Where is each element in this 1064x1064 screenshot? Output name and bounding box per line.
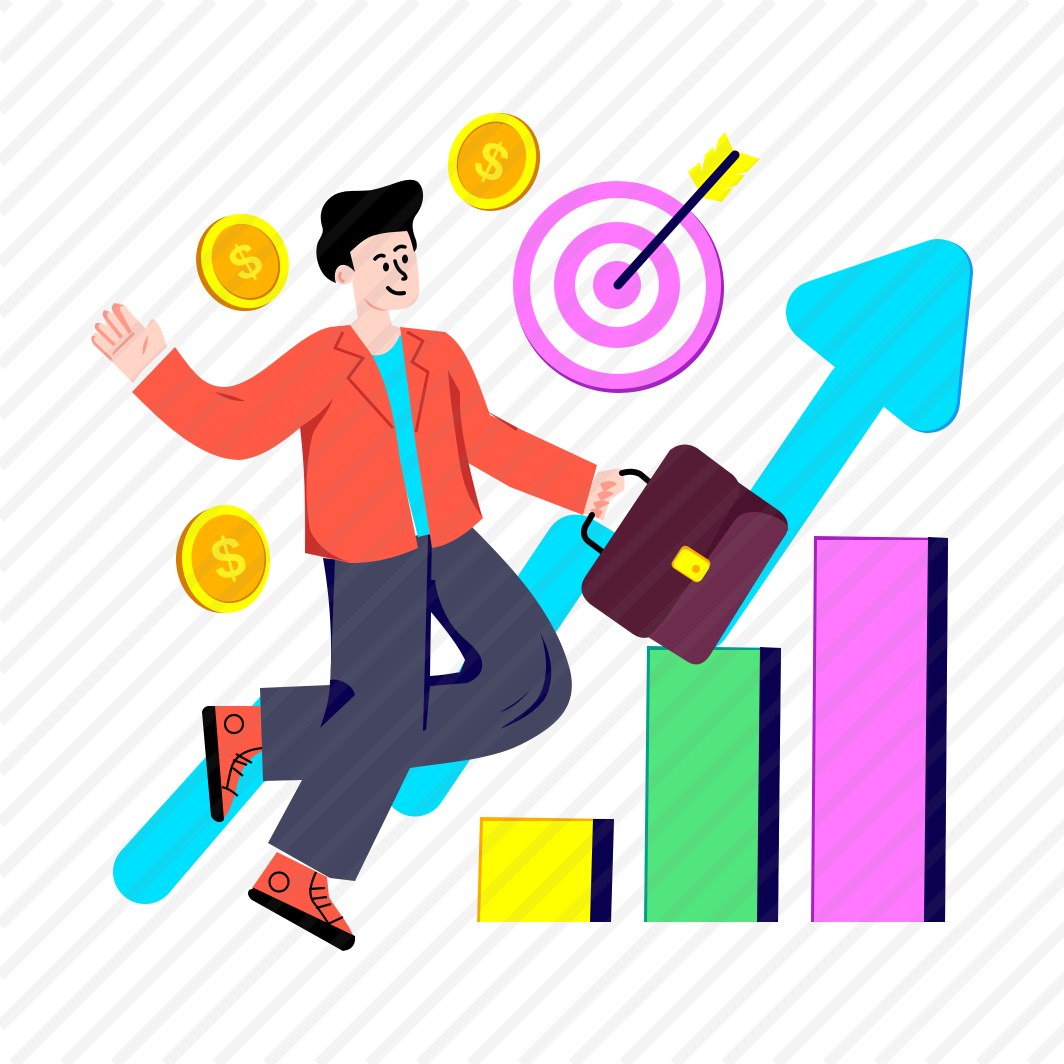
- handle: [584, 472, 652, 553]
- coin left upper: [180, 199, 304, 326]
- growth arrow: [113, 271, 941, 904]
- coin left upper: $: [219, 231, 272, 293]
- pants: [260, 527, 572, 881]
- left hand: [91, 303, 167, 383]
- right hand: [578, 468, 624, 520]
- target: [513, 181, 724, 393]
- front shoe: [248, 852, 355, 951]
- navy leg shadow: [323, 558, 340, 690]
- shirt: [372, 335, 434, 537]
- neck and head: [316, 180, 423, 362]
- pants leg gap: [423, 535, 482, 731]
- person: [91, 180, 788, 951]
- lapels: [335, 332, 393, 428]
- jacket: [132, 325, 597, 563]
- coin top: $: [465, 128, 518, 195]
- bar: purple: [811, 536, 948, 922]
- face features: [375, 246, 406, 293]
- coin left lower: $: [204, 523, 252, 594]
- briefcase: [581, 444, 788, 664]
- clasp: [670, 544, 712, 584]
- dart: [618, 132, 760, 285]
- bar chart: [477, 536, 948, 922]
- bar: yellow: [477, 817, 614, 922]
- coin top: [432, 98, 556, 226]
- coin left lower: [173, 503, 273, 615]
- back shoe: [202, 706, 266, 822]
- pants creases: [500, 632, 551, 729]
- jacket shadows: [300, 398, 350, 562]
- bar: green: [644, 646, 781, 922]
- pants inner shadow: [320, 680, 355, 728]
- hair: [316, 180, 423, 283]
